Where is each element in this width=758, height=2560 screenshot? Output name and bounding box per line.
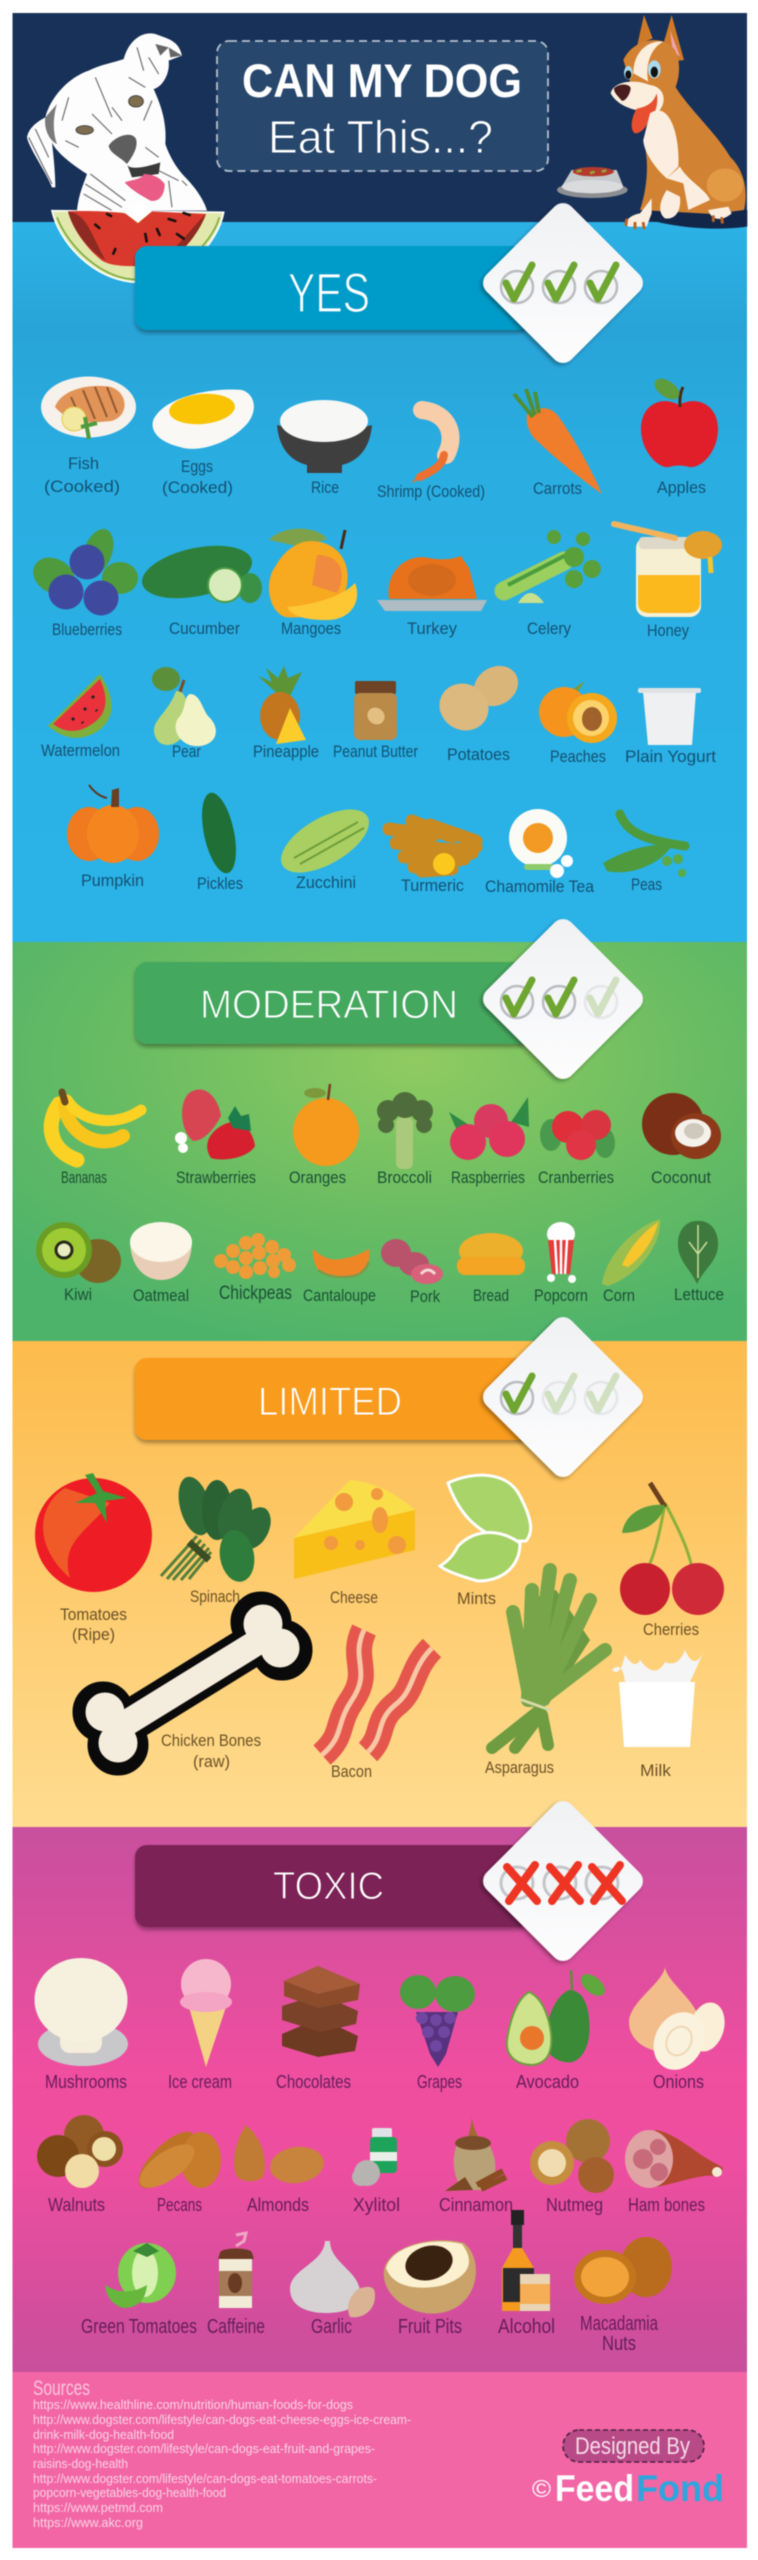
icon: cinnamon [445,2115,506,2191]
item: almonds [234,2125,326,2215]
icon: cherries [620,1483,724,1615]
item: mushrooms [34,1958,128,2092]
label: bananas: Bananas [61,1168,107,1187]
label: fish: Fish [68,454,99,473]
icon: avocado [507,1970,609,2065]
label: nutmeg: Nutmeg [546,2195,603,2215]
section header: limited [135,1312,648,1482]
label: pineapple: Pineapple [253,742,319,761]
icon: coffee [218,2233,254,2308]
item: turmeric [389,821,476,895]
sources text: popcorn-vegetables-dog-health-food [33,2485,226,2500]
icon: hazelnuts [37,2115,123,2188]
label: popcorn: Popcorn [534,1286,588,1305]
icon: nutmeg [530,2119,614,2193]
icon: watermelon [48,674,112,738]
label: fish [44,454,120,496]
panel: yes section background [12,222,747,942]
banner: limited [135,1358,530,1440]
icon: chamomile tea [509,809,573,878]
label: turmeric: Turmeric [401,876,464,895]
item: coconut [642,1093,721,1187]
icon: chickpeas [214,1233,296,1279]
label: chicken bones [161,1731,261,1771]
icon: orange [293,1084,359,1166]
panel: toxic section background [12,1827,747,2372]
sources text: Sources [33,2377,90,2400]
label: rice: Rice [311,478,339,497]
icon: peanut butter [354,681,397,740]
item: garlic [290,2241,375,2338]
label: spinach: Spinach [190,1587,240,1606]
icon: broccoli [377,1092,433,1169]
icon: pecans [130,2123,221,2197]
item: pear [152,667,216,761]
banner: toxic [135,1845,530,1927]
label: grapes: Grapes [417,2072,462,2092]
sources text: http://www.dogster.com/lifestyle/can-dogs-eat-tomatoes-carrots- [33,2471,377,2486]
item: cinnamon [439,2115,513,2215]
label: garlic: Garlic [311,2316,352,2338]
item: xylitol [352,2128,400,2215]
icon: diamond rating cross [478,1796,648,1966]
item: alcohol [498,2210,555,2338]
label: alcohol: Alcohol [498,2316,555,2338]
item: carrots [514,389,602,498]
icon: bananas [51,1092,141,1160]
item: eggs [153,389,254,497]
icon: spinach [161,1473,277,1585]
banner: moderation [135,962,530,1044]
item: tomatoes [35,1473,152,1644]
label: pork: Pork [410,1287,440,1306]
icon: grapes [400,1975,475,2067]
item: pumpkin [67,785,159,890]
icon: diamond rating 3 of 3 [478,198,648,368]
item: potatoes [431,658,525,764]
sources text: drink-milk-dog-health-food [33,2427,174,2442]
designed by badge: Designed By [575,2433,690,2460]
icon: shrimp [411,410,451,483]
food grid: yes [26,374,722,896]
icon: bread [457,1233,525,1275]
label: almonds: Almonds [247,2195,309,2215]
label: chickpeas: Chickpeas [219,1283,292,1304]
label: walnuts: Walnuts [48,2195,105,2215]
item: oranges [289,1084,359,1187]
item: ham bones [625,2130,723,2215]
label: shrimp: Shrimp (Cooked) [377,482,485,501]
label: honey: Honey [647,621,689,640]
icon: cheese [294,1480,415,1579]
logo: feedfond [532,2468,724,2509]
item: rice [277,400,372,497]
item: macadamia nuts [574,2237,672,2355]
label: tomatoes: (Ripe) [72,1625,115,1644]
sources text: https://www.petmd.com [33,2500,163,2515]
label: macadamia nuts [580,2313,659,2355]
icon: asparagus [492,1570,605,1748]
icon: almonds [234,2125,326,2187]
item: cranberries [538,1110,615,1187]
label: potatoes: Potatoes [447,745,510,764]
icon: turkey [377,556,487,611]
label: fruit pits: Fruit Pits [398,2316,462,2338]
label: strawberries: Strawberries [176,1168,256,1187]
item: pineapple [253,666,319,761]
label: chicken bones: Chicken Bones [161,1731,261,1750]
icon: oatmeal [130,1222,192,1280]
item: cantaloupe [303,1249,376,1305]
item: chickpeas [214,1233,296,1304]
sources text: http://www.dogster.com/lifestyle/can-dogs-eat-cheese-eggs-ice-cream- [33,2412,411,2427]
icon: fish [41,376,136,439]
item: turkey [377,556,487,638]
logo: feedfond: Feed [555,2468,634,2509]
item: zucchini [271,797,379,892]
item: chocolates [276,1966,360,2092]
icon: diamond rating 2 of 3 [478,914,648,1084]
label: coconut: Coconut [651,1168,711,1187]
label: peanut butter: Peanut Butter [333,742,418,761]
item: lettuce [674,1221,724,1304]
icon: pineapple [258,666,306,744]
item: fruit pits [384,2240,476,2338]
item: ice cream [168,1959,232,2092]
item: shrimp [377,410,485,501]
label: oranges: Oranges [289,1168,346,1187]
panel: footer background [12,2372,747,2548]
icon: rice [277,400,372,473]
title: can my dog: CAN MY DOG [242,54,522,107]
illustration: brown dog [557,15,747,229]
item: caffeine [207,2233,265,2338]
label: mints: Mints [457,1589,496,1608]
icon: zucchini [271,797,379,885]
item: apples [641,374,718,497]
item: chicken bones [73,1592,312,1775]
icon: cantaloupe [313,1249,369,1277]
item: honey [614,524,722,640]
item: blueberries [26,525,138,639]
label: green tomatoes: Green Tomatoes [81,2316,197,2338]
item: oatmeal [130,1222,192,1305]
item: mints [440,1475,531,1608]
item: pecans [130,2123,221,2215]
item: nutmeg [530,2119,614,2215]
icon: strawberries [175,1090,255,1160]
icon: walnut [574,2237,672,2304]
food grid: toxic [34,1958,730,2355]
label: kiwi: Kiwi [64,1285,92,1304]
icon: pork [381,1239,443,1284]
label: ham bones: Ham bones [628,2195,705,2215]
label: caffeine: Caffeine [207,2316,265,2338]
icon: bone [73,1592,312,1775]
banner: yes [135,246,530,330]
label: xylitol: Xylitol [353,2195,400,2215]
item: corn [602,1219,660,1305]
icon: yogurt [638,688,701,745]
item: peanut butter [333,681,418,761]
label: milk: Milk [640,1761,672,1780]
label: apples: Apples [657,478,706,497]
item: grapes [400,1975,475,2092]
item: raspberries [449,1097,529,1187]
logo: feedfond: Fond [636,2468,724,2509]
label: raspberries: Raspberries [451,1168,525,1187]
icon: cranberries [540,1110,615,1160]
icon: fruit pit [384,2240,476,2314]
icon: mint leaves [440,1475,531,1581]
icon: carrot [514,389,602,494]
icon: mushroom [34,1958,128,2066]
label: cinnamon: Cinnamon [439,2195,513,2215]
label: cranberries: Cranberries [538,1168,614,1187]
label: avocado: Avocado [516,2072,579,2092]
item: plain yogurt [625,688,716,766]
label: tomatoes [60,1605,127,1644]
icon: mango [269,529,357,620]
icon: green tomato [105,2243,176,2308]
label: bread: Bread [473,1286,509,1305]
label: carrots: Carrots [533,479,582,498]
item: peas [603,814,686,894]
icon: egg [153,389,254,449]
sources text: https://www.akc.org [33,2515,143,2530]
section header: toxic [135,1796,648,1966]
item: cheese [294,1480,415,1607]
icon: peaches [539,681,617,743]
sources text: https://www.healthline.com/nutrition/human-foods-for-dogs [33,2397,353,2412]
title: eat this: Eat This...? [268,111,493,163]
label: chamomile tea: Chamomile Tea [485,877,595,896]
label: corn: Corn [603,1286,635,1305]
icon: coconut [642,1093,721,1159]
icon: lettuce [678,1221,718,1284]
label: eggs: Eggs [181,457,213,476]
icon: chocolates [282,1966,360,2057]
item: walnuts [37,2115,123,2215]
logo: feedfond: © [532,2476,551,2503]
item: milk [612,1650,704,1780]
label: pear: Pear [172,742,201,761]
icon: turmeric [389,821,476,875]
sources text [33,2377,411,2530]
label: chocolates: Chocolates [276,2072,351,2092]
icon: xylitol [352,2128,397,2186]
label: fish: (Cooked) [44,477,120,496]
heading: moderation: MODERATION [200,983,458,1027]
icon: celery [504,530,601,603]
label: eggs: (Cooked) [162,478,233,497]
label: mangoes: Mangoes [281,619,341,638]
label: cheese: Cheese [330,1588,378,1607]
item: watermelon [41,674,120,760]
icon: whisky bottle [502,2210,550,2311]
icon: potatoes [431,658,525,739]
label: cantaloupe: Cantaloupe [303,1286,376,1305]
item: strawberries [175,1090,256,1187]
icon: garlic [290,2241,375,2317]
heading: toxic: TOXIC [273,1865,384,1908]
label: tomatoes: Tomatoes [60,1605,127,1624]
label: cucumber: Cucumber [169,619,240,638]
label: macadamia nuts: Nuts [602,2333,636,2355]
label: pickles: Pickles [197,874,243,893]
icon: cucumber [137,537,262,607]
label: broccoli: Broccoli [377,1168,432,1187]
item: mangoes [269,529,357,638]
label: lettuce: Lettuce [674,1285,724,1304]
food grid: moderation [36,1084,724,1306]
label: plain yogurt: Plain Yogurt [625,747,716,766]
label: peas: Peas [631,875,662,894]
sources text: raisins-dog-health [33,2456,128,2471]
item: bread [457,1233,525,1305]
label: watermelon: Watermelon [41,741,120,760]
label: eggs [162,457,233,497]
item: onions [629,1967,730,2092]
icon: bacon [322,1630,432,1755]
item: cherries [620,1483,724,1639]
icon: tomato [35,1473,152,1592]
icon: ham [625,2130,723,2188]
icon: pumpkin [67,785,159,863]
sources text: http://www.dogster.com/lifestyle/can-dogs-eat-fruit-and-grapes- [33,2441,375,2456]
label: cherries: Cherries [643,1620,699,1639]
title box [217,41,548,171]
panel: limited section background [12,1341,747,1827]
item: chamomile tea [485,809,595,896]
label: peaches: Peaches [550,747,606,766]
item: kiwi [36,1222,121,1304]
section header: yes [135,198,648,368]
section header: moderation [135,914,648,1084]
item: pickles [196,790,243,893]
label: chicken bones: (raw) [193,1752,230,1771]
item: pork [381,1239,443,1306]
icon: honey [614,524,722,617]
label: zucchini: Zucchini [296,873,356,892]
food grid: limited [35,1473,724,1781]
icon: diamond rating 1 of 3 [478,1312,648,1482]
label: macadamia nuts: Macadamia [580,2313,659,2335]
label: turkey: Turkey [407,619,457,638]
label: asparagus: Asparagus [485,1758,554,1777]
label: celery: Celery [527,619,571,638]
label: mushrooms: Mushrooms [45,2072,127,2092]
icon: corn [602,1219,660,1286]
heading: yes: YES [288,261,370,324]
icon: raspberries [449,1097,529,1160]
icon: peas [603,814,686,877]
icon: blueberries [26,525,138,616]
panel: header background [12,13,747,222]
icon: onions [629,1967,730,2079]
icon: pear [152,667,216,746]
item: broccoli [377,1092,433,1187]
icon: kiwi [36,1222,121,1283]
icon: ice cream [180,1959,232,2067]
item: bacon [322,1630,432,1781]
item: peaches [539,681,617,766]
item: asparagus [485,1570,605,1777]
label: onions: Onions [653,2072,704,2092]
label: ice cream: Ice cream [168,2072,232,2092]
heading: limited: LIMITED [258,1380,402,1424]
item: cucumber [137,537,262,638]
item: fish [41,376,136,496]
item: green tomatoes [81,2243,197,2338]
panel: moderation section background [12,942,747,1341]
icon: popcorn [547,1222,576,1283]
label: pumpkin: Pumpkin [81,871,144,890]
item: bananas [51,1092,141,1187]
icon: milk [612,1650,704,1747]
label: oatmeal: Oatmeal [133,1286,189,1305]
item: celery [504,530,601,638]
icon: apple [641,374,718,467]
label: pecans: Pecans [157,2195,202,2215]
label: bacon: Bacon [331,1762,372,1781]
item: spinach [161,1473,277,1606]
label: blueberries: Blueberries [52,620,122,639]
illustration: dog with watermelon [27,33,224,282]
icon: pickle [196,790,242,876]
item: popcorn [534,1222,588,1305]
item: avocado [507,1970,609,2092]
